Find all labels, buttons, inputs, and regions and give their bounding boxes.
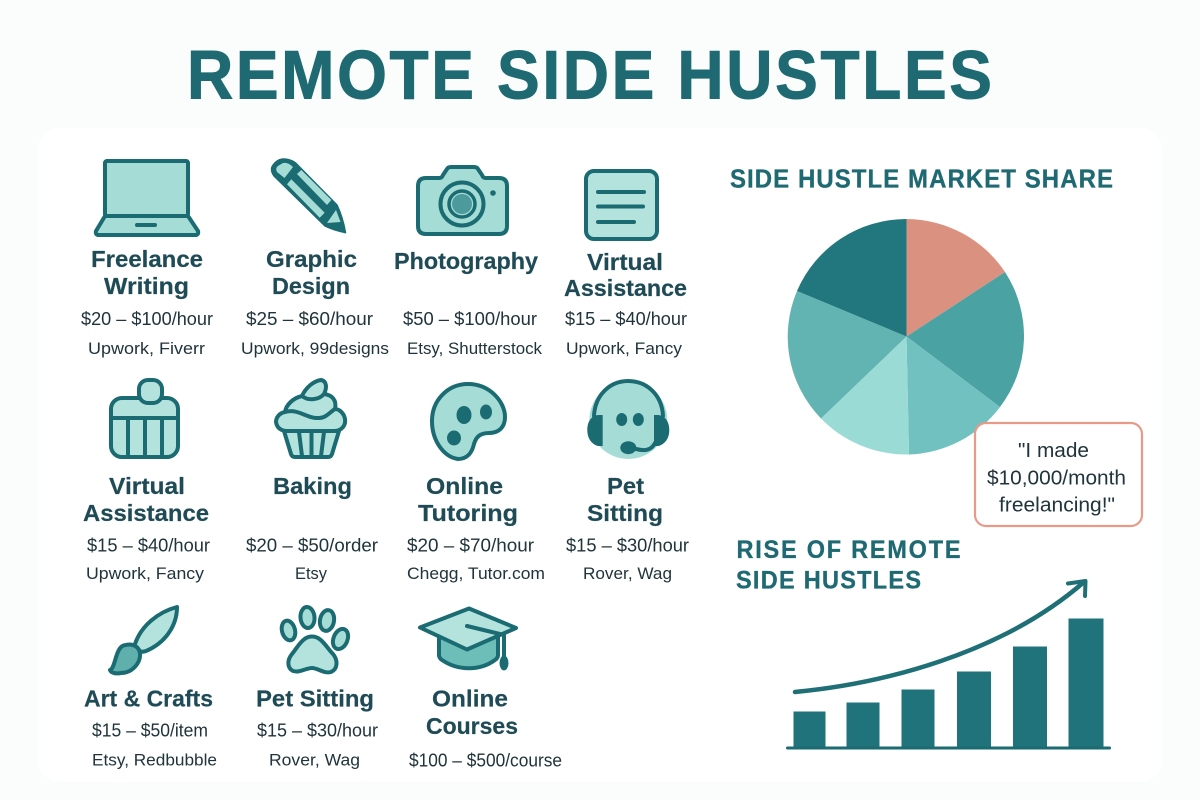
platforms: Etsy [295, 564, 327, 583]
panel: virtual assistance 2 [83, 380, 210, 583]
heading: market share: SIDE HUSTLE MARKET SHARE [730, 165, 1113, 194]
heading: pet sitting: Sitting [587, 500, 663, 526]
heading: online tutoring: Online [426, 473, 503, 499]
rate: $15 – $40/hour [87, 536, 210, 556]
rate: $15 – $30/hour [566, 536, 689, 556]
heading: virtual assistance: Assistance [83, 500, 209, 526]
heading: graphic design: Graphic [266, 246, 357, 272]
panel: pet sitting [566, 381, 689, 583]
heading: virtual assistance: Assistance [564, 275, 687, 301]
panel: graphic design [241, 159, 389, 358]
callout: testimonial: $10,000/month [987, 468, 1126, 490]
heading: art and crafts: Art & Crafts [84, 686, 213, 712]
icon: camera [418, 167, 507, 234]
panel: online courses [409, 608, 562, 770]
heading: online tutoring: Tutoring [418, 500, 518, 526]
title: REMOTE SIDE HUSTLES [187, 37, 992, 114]
heading: baking: Baking [273, 473, 352, 499]
panel: photography [394, 167, 542, 358]
panel: pet sitting 2 [256, 606, 378, 770]
platforms: Upwork, Fancy [86, 564, 205, 583]
callout: testimonial [975, 423, 1142, 526]
platforms: Etsy, Shutterstock [407, 339, 542, 358]
heading: virtual assistance: Virtual [109, 473, 185, 499]
heading: rise of remote side hustles: RISE OF REMOTE [736, 536, 960, 564]
heading: rise of remote side hustles [736, 536, 960, 595]
rate: $20 – $100/hour [81, 309, 213, 329]
heading: online courses: Courses [426, 713, 518, 739]
panel: baking [246, 380, 378, 583]
heading: photography: Photography [394, 248, 538, 274]
rate: $15 – $50/item [92, 720, 208, 740]
icon: paw [280, 606, 351, 672]
rate: $25 – $60/hour [246, 309, 373, 329]
rate: $20 – $50/order [246, 536, 378, 556]
heading: freelance writing: Writing [104, 273, 189, 299]
panel: online tutoring [407, 384, 545, 583]
platforms: Etsy, Redbubble [92, 750, 217, 770]
platforms: Upwork, 99designs [241, 339, 389, 358]
arrow: growth trend [795, 581, 1086, 692]
platforms: Chegg, Tutor.com [407, 564, 545, 583]
panel: virtual assistance [564, 171, 687, 358]
panel: art and crafts [84, 607, 217, 770]
heading: graphic design: Design [272, 273, 350, 299]
icon: basket [111, 380, 178, 457]
bar chart [786, 618, 1111, 750]
rate: $50 – $100/hour [403, 309, 537, 329]
callout: testimonial: "I made [1018, 440, 1089, 462]
heading: virtual assistance: Virtual [587, 249, 663, 275]
platforms: Upwork, Fiverr [88, 339, 205, 358]
icon: headset [587, 381, 669, 459]
platforms: Upwork, Fancy [566, 339, 683, 358]
heading: pet sitting: Pet Sitting [256, 686, 374, 712]
icon: graduation cap [420, 608, 516, 670]
rate: $20 – $70/hour [407, 536, 534, 556]
icon: paintbrush [110, 607, 177, 673]
rate: $15 – $40/hour [565, 309, 687, 329]
pie chart [788, 219, 1024, 455]
heading: online courses: Online [432, 686, 508, 712]
heading: rise of remote side hustles: SIDE HUSTLES [736, 567, 921, 595]
panel: main card [38, 128, 1162, 782]
icon: cupcake [276, 380, 345, 457]
platforms: Rover, Wag [269, 750, 360, 770]
rate: $100 – $500/course [409, 750, 562, 770]
rate: $15 – $30/hour [257, 720, 378, 740]
icon: laptop [96, 161, 198, 235]
heading: pet sitting: Pet [607, 473, 644, 499]
panel: freelance writing [81, 161, 213, 358]
icon: document [586, 171, 657, 239]
icon: pencil [272, 159, 346, 233]
callout: testimonial: freelancing!" [999, 494, 1115, 516]
icon: palette [432, 384, 505, 459]
platforms: Rover, Wag [583, 564, 672, 583]
heading: freelance writing: Freelance [91, 246, 203, 272]
